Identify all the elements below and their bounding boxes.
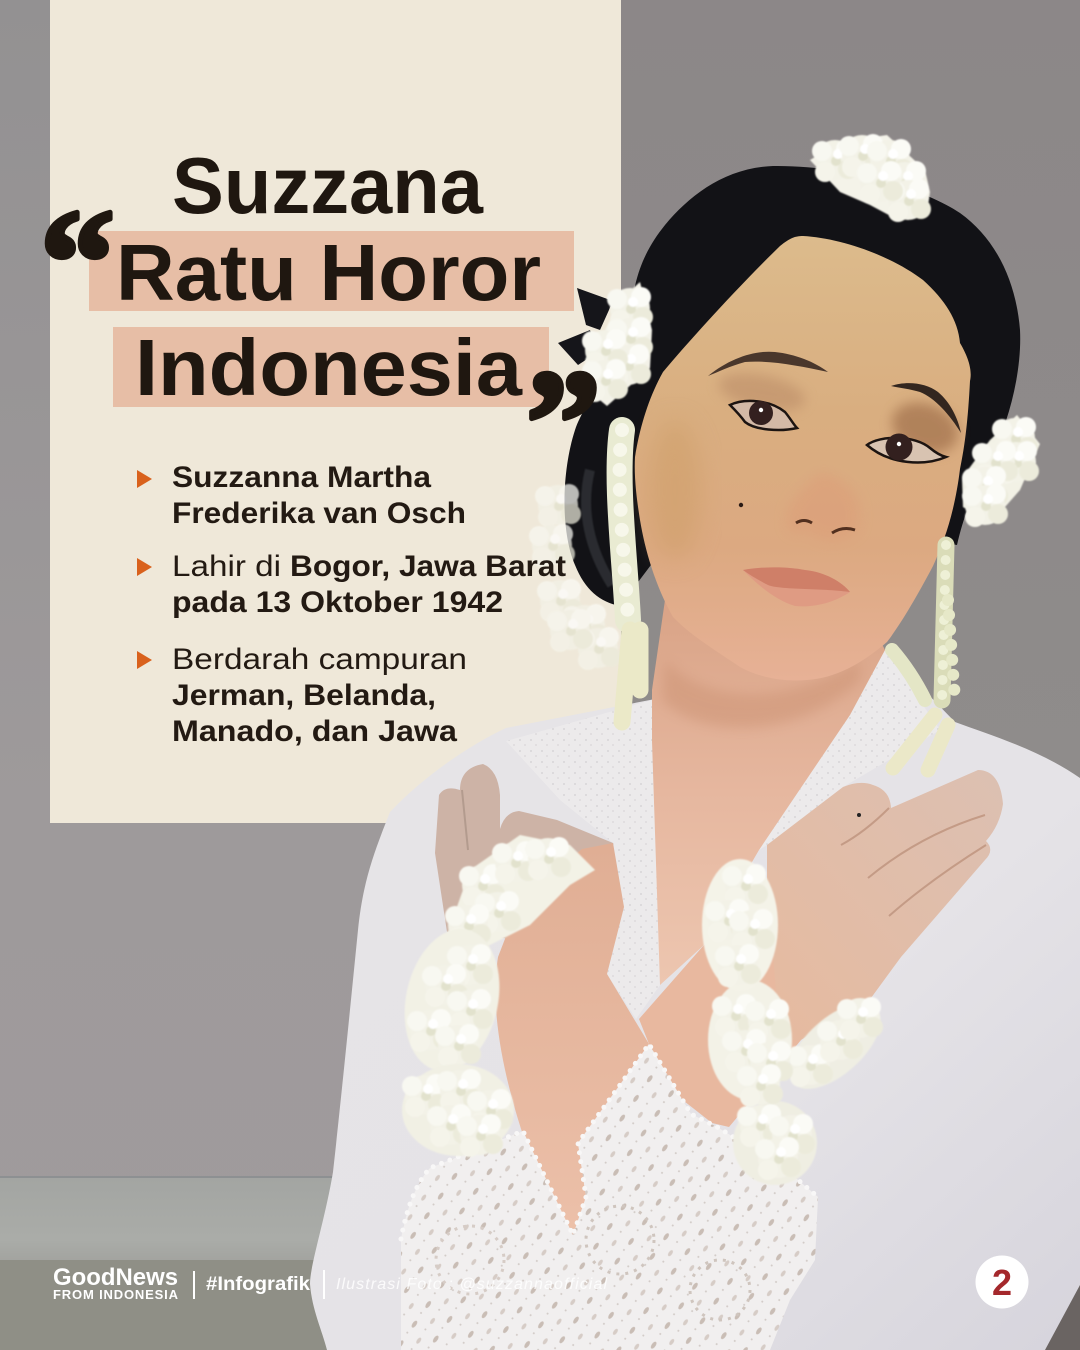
lace lapel left <box>506 700 660 1019</box>
jasmine strand: left <box>620 430 640 722</box>
hair flower: top <box>810 134 931 222</box>
face <box>635 236 971 680</box>
bullet: birth: pada 13 Oktober 1942 <box>172 586 503 619</box>
nose <box>787 472 860 541</box>
page number badge <box>976 1256 1028 1308</box>
bracelet right: top cluster <box>702 859 778 991</box>
bullet list <box>137 461 566 748</box>
bullet: ancestry <box>137 643 467 748</box>
bracelet right: lower cluster <box>733 1101 817 1185</box>
mole <box>739 503 743 507</box>
title: Suzzana <box>172 141 483 230</box>
blouse body <box>310 650 1080 1350</box>
footer <box>53 1264 607 1302</box>
forearm left crossing <box>495 843 649 1235</box>
eyes <box>730 401 797 430</box>
dark batik corner <box>1045 1285 1080 1350</box>
bullet: name: Suzzanna Martha <box>172 461 431 494</box>
hand right <box>767 770 1003 1040</box>
lace collar right <box>759 650 940 850</box>
closing quotation mark: ” <box>526 340 601 506</box>
neck shadow <box>662 660 860 728</box>
hand left raised <box>435 764 613 940</box>
portrait figure <box>310 134 1080 1350</box>
logo: FROM INDONESIA <box>53 1287 179 1302</box>
bullet: birth: Bogor, Jawa Barat <box>290 550 566 583</box>
lower hair flowers <box>529 484 621 670</box>
bracelet left: top cluster <box>445 835 595 950</box>
bullet: ancestry: Berdarah campuran <box>172 643 467 676</box>
lace cuff <box>401 1044 818 1350</box>
hashtag: #Infografik <box>206 1274 310 1295</box>
title highlight bars <box>89 231 574 407</box>
photo credit: Ilustrasi Foto : @suzzannaofficial <box>336 1276 607 1293</box>
title: Indonesia <box>135 323 523 412</box>
eye shadow <box>715 366 809 418</box>
bullet: name <box>137 461 466 530</box>
bullet: name: Frederika van Osch <box>172 497 466 530</box>
title <box>116 141 541 412</box>
bracelet left: middle cluster <box>392 920 512 1080</box>
bullet: ancestry: Manado, dan Jawa <box>172 715 457 748</box>
hair flower: left <box>577 282 653 406</box>
bullet: birth: Lahir di <box>172 550 281 583</box>
jasmine strand: right <box>892 545 955 770</box>
arm right crossing <box>639 900 801 1127</box>
opening quotation mark: “ <box>40 179 115 345</box>
hair back and bun <box>564 166 1020 606</box>
bullet: birth <box>137 550 566 619</box>
eyebrows <box>708 352 828 376</box>
lips <box>743 567 850 606</box>
panel: cream text background <box>50 0 621 823</box>
logo: GoodNews <box>53 1264 178 1291</box>
bow <box>558 288 613 365</box>
neck and chest skin <box>652 600 885 985</box>
title: Ratu Horor <box>116 228 541 317</box>
bracelet right: middle cluster <box>708 980 793 1107</box>
page number badge: 2 <box>992 1262 1012 1303</box>
cheek shading <box>649 420 701 560</box>
bracelet left: bottom cluster <box>402 1064 514 1157</box>
bracelet right: right cluster <box>775 988 895 1104</box>
bullet: ancestry: Jerman, Belanda, <box>172 679 436 712</box>
hair flower: right <box>962 415 1040 527</box>
